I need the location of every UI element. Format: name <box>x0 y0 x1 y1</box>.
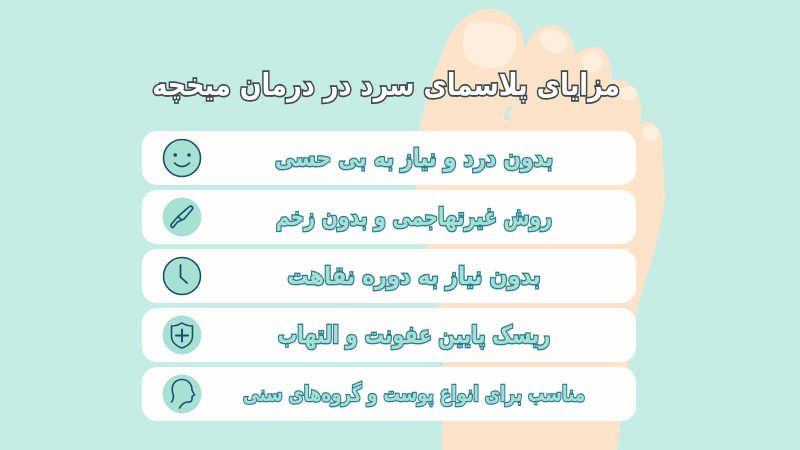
panel: benefit 2 <box>142 190 636 244</box>
icon: smiley face <box>162 138 202 178</box>
icon: third toenail <box>582 52 602 72</box>
icon: clock <box>162 256 202 296</box>
toe gap <box>504 105 511 121</box>
icon: second toenail <box>540 30 567 53</box>
icon: big toenail <box>463 22 516 68</box>
icon: fourth toenail <box>619 86 637 100</box>
icon: scalpel <box>162 198 202 236</box>
icon: fifth toenail <box>643 125 659 141</box>
icon: shield with plus <box>162 316 202 354</box>
panel: benefit 3 <box>142 249 636 303</box>
benefit text: روش غیرتهاجمی و بدون زخم <box>276 203 552 231</box>
benefit text: بدون درد و نیاز به بی حسی <box>275 144 553 172</box>
benefit text: بدون نیاز به دوره نقاهت <box>287 262 541 290</box>
panel: benefit 1 <box>142 131 636 185</box>
icon: human head profile <box>162 374 202 414</box>
benefit text: مناسب برای انواع پوست و گروه‌های سنی <box>243 382 585 406</box>
panel: benefit 5 <box>142 367 636 421</box>
benefit text: ریسک پایین عفونت و التهاب <box>278 321 550 349</box>
title: مزایای پلاسمای سرد در درمان میخچه <box>152 68 620 103</box>
panel: benefit 4 <box>142 308 636 362</box>
